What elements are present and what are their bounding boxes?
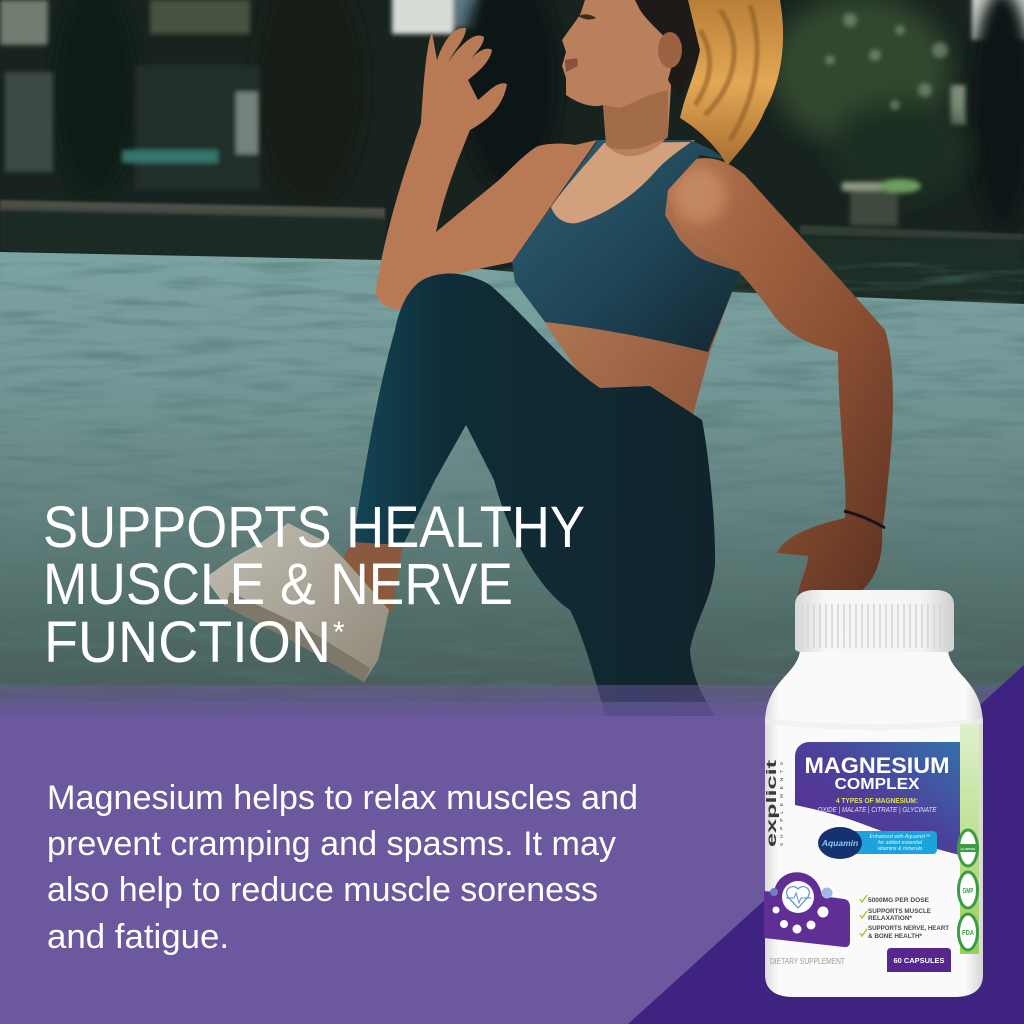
lake xyxy=(0,252,1024,720)
foliage on right xyxy=(770,0,970,200)
product name: COMPLEX xyxy=(834,776,920,793)
torso skin xyxy=(545,140,740,422)
title: * xyxy=(333,616,345,649)
magnesium types xyxy=(818,796,937,814)
body text: and fatigue. xyxy=(47,918,229,956)
title: MUSCLE & NERVE xyxy=(43,552,513,617)
heart icon block xyxy=(764,872,850,947)
ankle xyxy=(340,542,403,612)
dark purple diagonal corner xyxy=(628,665,1024,1024)
benefit list: RELAXATION* xyxy=(868,915,912,922)
benefit list: & BONE HEALTH* xyxy=(868,933,922,940)
bottle cap xyxy=(795,590,954,652)
Aquamin badge xyxy=(818,827,937,859)
magnesium types: 4 TYPES OF MAGNESIUM: xyxy=(836,796,918,805)
brand logo: explicit xyxy=(763,759,779,847)
sky patches xyxy=(0,0,1024,125)
sneaker xyxy=(205,523,389,682)
dietary supplement label: DIETARY SUPPLEMENT xyxy=(770,956,846,966)
right arm and hand xyxy=(660,158,893,598)
brand logo: SUPPLEMENTS xyxy=(779,762,785,846)
translucent purple band xyxy=(0,685,1024,716)
Aquamin badge: for added essential xyxy=(878,840,923,846)
panel: purple text block background xyxy=(0,716,1024,1024)
certification seals: FDA xyxy=(962,928,974,937)
certification seals: GMP xyxy=(962,888,974,895)
capsule count tag: 60 CAPSULES xyxy=(894,956,944,965)
body text: prevent cramping and spasms. It may xyxy=(47,825,616,863)
distant trees xyxy=(53,0,1024,230)
product name xyxy=(804,753,950,793)
shoreline xyxy=(0,200,385,220)
photo background: trees and lake xyxy=(0,0,1024,720)
building on far shore xyxy=(5,65,921,226)
neck scoop skin xyxy=(551,142,691,223)
green side strip xyxy=(960,724,979,954)
benefit list: SUPPORTS MUSCLE xyxy=(868,908,931,915)
title xyxy=(43,495,585,675)
mouth xyxy=(565,58,578,72)
eye xyxy=(578,14,596,20)
product name: MAGNESIUM xyxy=(804,753,950,778)
bottle body xyxy=(765,650,983,997)
magnesium types: OXIDE | MALATE | CITRATE | GLYCINATE xyxy=(818,805,937,814)
wrist band xyxy=(844,511,885,528)
Aquamin badge: vitamins & minerals xyxy=(878,846,923,852)
brand logo xyxy=(763,759,785,847)
title: SUPPORTS HEALTHY xyxy=(43,495,585,560)
sports bra xyxy=(512,140,740,352)
neck shadow xyxy=(603,90,668,149)
benefit list: 5000MG PER DOSE xyxy=(868,897,929,904)
Aquamin badge: Aquamin xyxy=(821,838,858,848)
ponytail xyxy=(680,0,783,166)
legging with knee, thigh and lower leg xyxy=(352,273,716,718)
body text xyxy=(47,779,638,956)
ear xyxy=(658,32,682,68)
certification seals: ALL NATURAL xyxy=(960,847,976,851)
face and neck xyxy=(562,0,690,156)
photo subject: woman running xyxy=(205,0,893,718)
shoulder highlight xyxy=(674,167,726,223)
dark hair xyxy=(635,0,705,100)
Aquamin badge: Enhanced with Aquamin™ xyxy=(870,834,930,840)
product bottle xyxy=(763,590,983,997)
reflections xyxy=(0,210,385,262)
certification seals xyxy=(958,830,978,950)
benefit list xyxy=(860,895,950,940)
purple label banner xyxy=(795,742,960,855)
benefit list: SUPPORTS NERVE, HEART xyxy=(868,925,950,932)
foliage highlights xyxy=(825,13,948,110)
body text: also help to reduce muscle soreness xyxy=(47,871,598,909)
title: FUNCTION xyxy=(44,610,331,675)
hair streaks xyxy=(695,5,757,140)
raised arm and hand xyxy=(376,28,597,310)
capsule count tag xyxy=(887,948,951,972)
body text: Magnesium helps to relax muscles and xyxy=(47,779,638,817)
